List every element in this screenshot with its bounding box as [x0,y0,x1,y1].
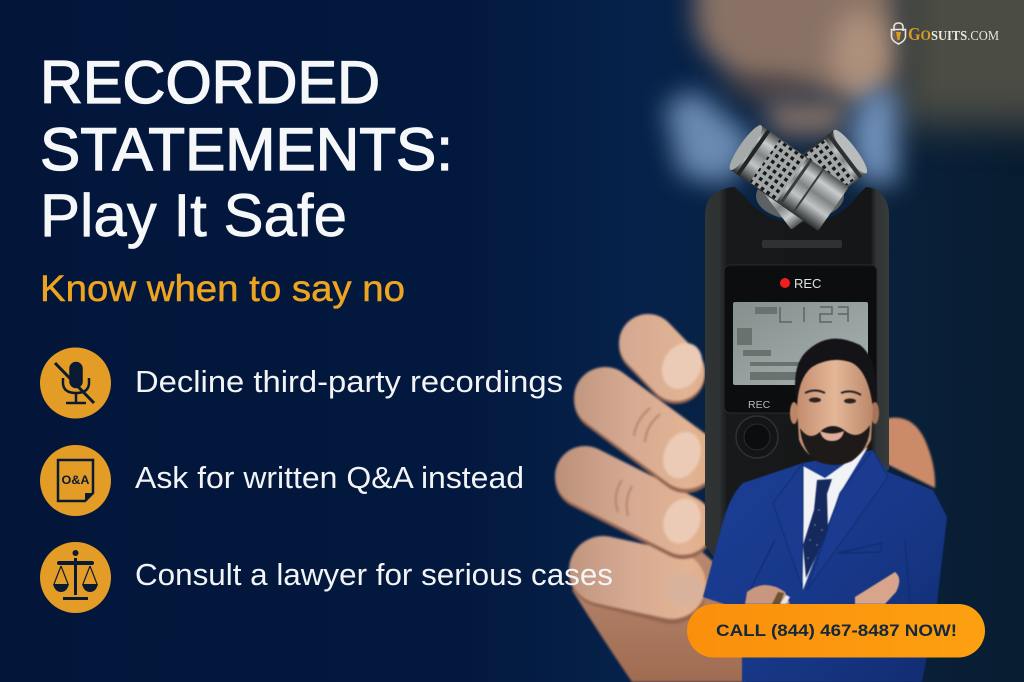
recording indicator [780,276,821,291]
forearm and palm [572,550,745,682]
logo wordmark: GOSUITS.COM [908,24,999,44]
title [40,49,453,249]
right capsule [759,126,871,230]
face [797,360,873,464]
REC button label: REC [748,399,771,411]
finger: ring finger [585,476,683,529]
suit [703,450,947,682]
LCD display [733,302,868,385]
icon: padlock shield [892,23,906,44]
benefit list [40,348,613,613]
item: consult lawyer [40,542,613,613]
subtitle: Know when to say no [40,268,405,309]
text: written Q&A: Ask for written Q&A instead [135,460,524,495]
item: decline recordings [40,348,563,418]
hair [795,339,877,410]
text: decline recordings: Decline third-party recordings [135,364,563,399]
item: written Q&A [40,445,524,516]
eyes and brows [809,398,821,402]
fingernails [654,336,710,607]
finger: little finger [603,570,672,590]
suit pocket and sleeve folds [745,540,910,605]
title: STATEMENTS: [40,116,453,183]
thumb tip behind recorder [885,418,935,488]
recorder round button [736,416,778,458]
crossed arms [745,572,899,604]
icon: Q&A document: O&A [62,475,90,487]
icon: crossed-out microphone [40,348,111,418]
head [790,339,879,465]
title: Play It Safe [40,182,347,249]
call to action button: CALL (844) 467-8487 NOW! [716,622,957,640]
icon: scales of justice [40,542,111,613]
audio recorder [705,122,889,580]
finger: index finger [648,343,676,375]
recorder microphones [725,122,871,231]
title: RECORDED [40,49,380,116]
call to action button [687,604,985,658]
icon: Q&A document [40,445,111,516]
necktie [803,479,832,578]
recorder body [705,187,889,580]
lawyer portrait [703,339,947,682]
hand holding recorder [572,336,935,682]
beard [800,425,870,465]
text: consult lawyer: Consult a lawyer for serious cases [135,557,613,592]
logo: GoSuits.com [892,23,999,44]
recorder screen panel [724,265,877,413]
shirt and collar [802,447,868,590]
recording indicator: REC [794,276,821,291]
suit lapels [773,450,888,590]
left capsule [725,122,849,231]
finger: middle finger [605,398,686,462]
recorder slot [762,240,842,248]
